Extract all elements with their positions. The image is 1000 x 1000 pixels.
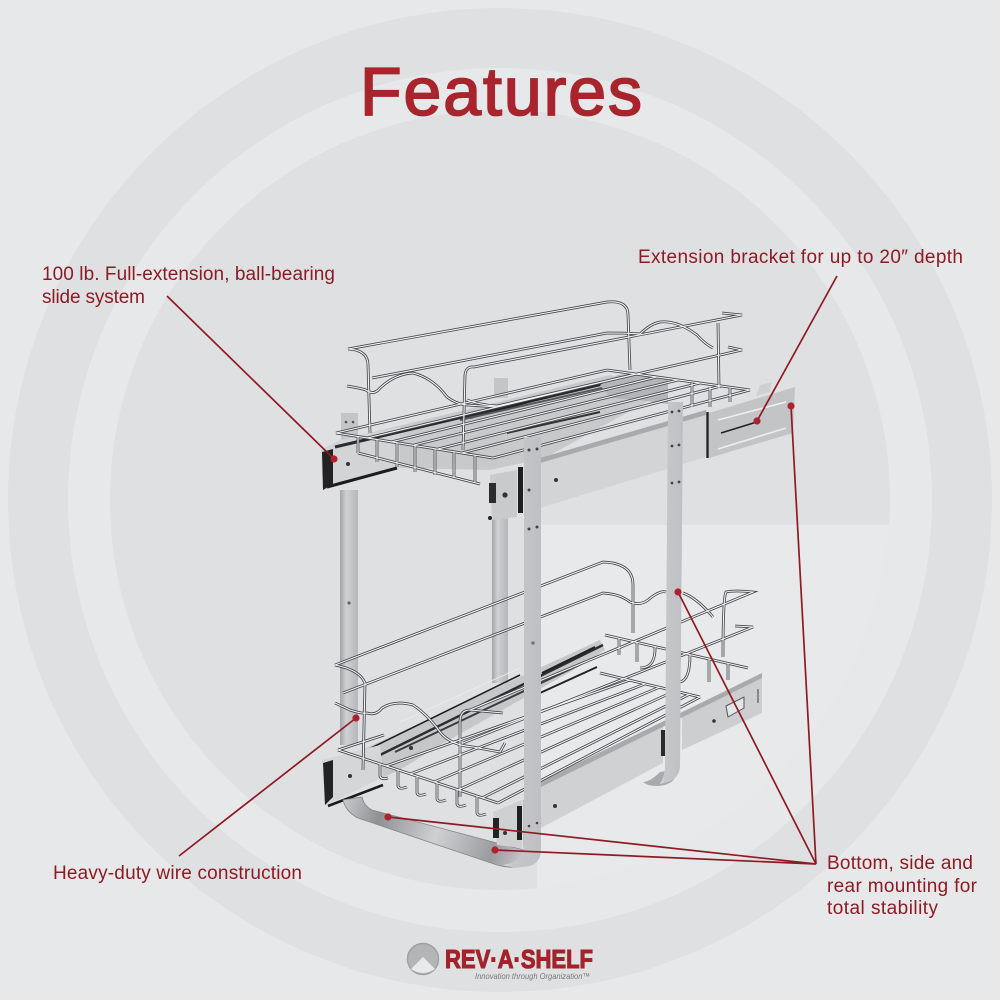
front centre post bbox=[503, 437, 541, 868]
lower foot bracket bbox=[343, 770, 675, 867]
front right post bbox=[660, 402, 683, 784]
callout text: mounting: Bottom, side and bbox=[827, 853, 973, 874]
logo wordmark: REV·A·SHELF bbox=[445, 944, 593, 974]
title: Features bbox=[360, 54, 642, 130]
callout: mounting bbox=[384, 402, 978, 919]
lower shelf wire basket bbox=[335, 562, 753, 815]
icon: logo mountain circle bbox=[408, 944, 438, 974]
extension bracket bbox=[708, 382, 795, 458]
callout text: mounting: rear mounting for bbox=[827, 876, 978, 897]
lower shelf slide bbox=[322, 640, 605, 806]
rear left post bbox=[340, 413, 358, 745]
product: two-tier pull-out wire organizer bbox=[321, 302, 795, 868]
callout: extension bracket bbox=[638, 247, 963, 425]
lower shelf side panel bbox=[541, 673, 762, 828]
logo bbox=[408, 944, 593, 981]
callout text: extension bracket: Extension bracket for up to 20″ depth bbox=[638, 247, 963, 268]
logo tagline: Innovation through Organization™ bbox=[475, 971, 590, 981]
callout text: slide system: slide system bbox=[42, 287, 145, 308]
upper shelf slide bbox=[321, 373, 668, 490]
lower centre bracket bbox=[493, 800, 522, 848]
callout: heavy-duty wire bbox=[53, 714, 360, 884]
callout text: slide system: 100 lb. Full-extension, ball-bearing bbox=[42, 264, 335, 285]
upper shelf side panel bbox=[540, 410, 706, 508]
rear right post bbox=[492, 378, 508, 683]
upper shelf wire basket bbox=[336, 302, 750, 484]
callout text: heavy-duty wire: Heavy-duty wire construction bbox=[53, 863, 302, 884]
upper centre bracket bbox=[488, 467, 523, 520]
callout text: mounting: total stability bbox=[827, 898, 938, 919]
callout: slide system bbox=[42, 264, 338, 463]
